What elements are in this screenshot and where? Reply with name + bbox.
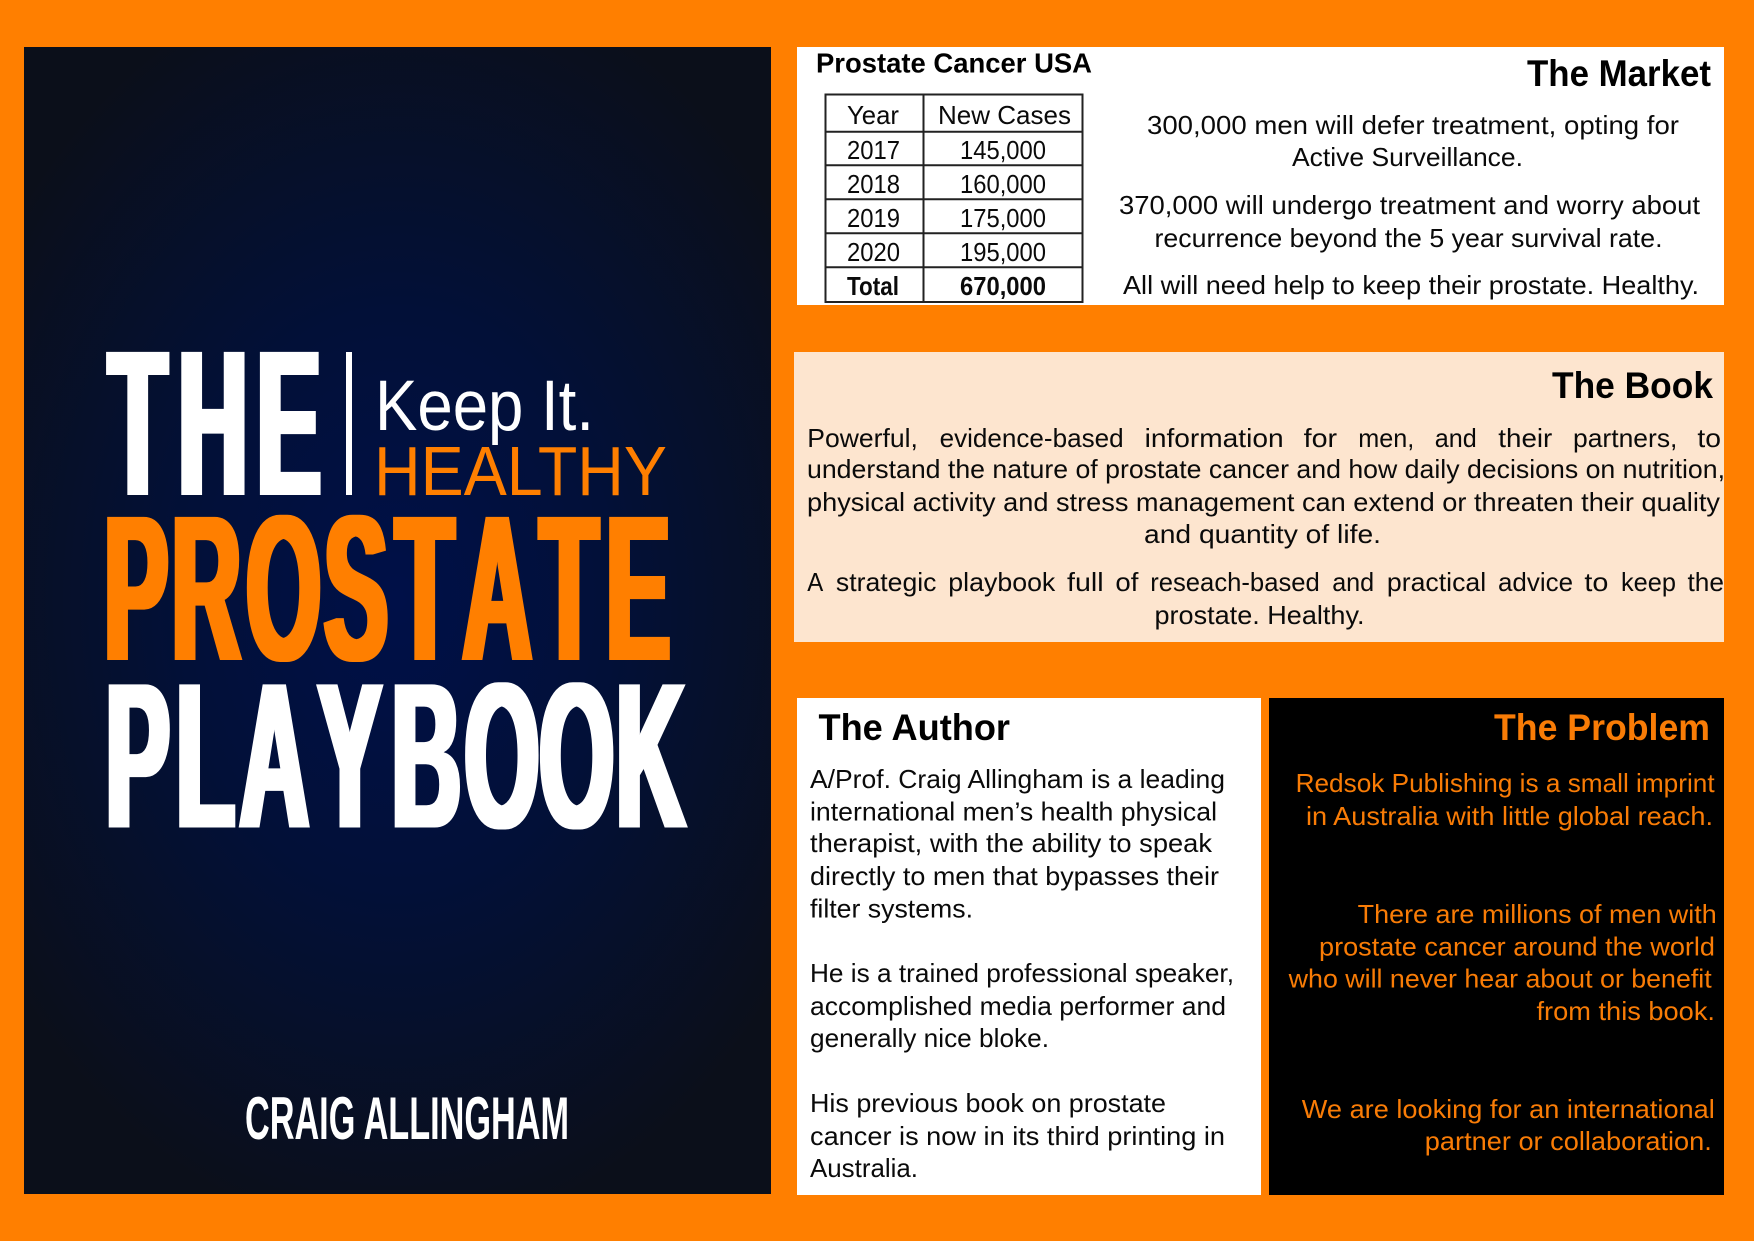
book body text: full: [1067, 567, 1104, 597]
market body text: 370,000 will undergo treatment and worry about: [1119, 190, 1701, 220]
author body text: international men’s health physical: [810, 796, 1217, 826]
author body text: Australia.: [810, 1153, 918, 1183]
author body text: A/Prof. Craig Allingham is a leading: [810, 764, 1225, 794]
cover subtitle: Keep It.: Keep It.: [375, 367, 594, 446]
cover title: PROSTATE: PROSTATE: [104, 472, 670, 705]
panel: the author: [797, 698, 1261, 1195]
cover author name: CRAIG ALLINGHAM: [245, 1085, 569, 1152]
book body text: partners,: [1573, 423, 1677, 453]
book background: [794, 352, 1724, 642]
book body text: information: [1145, 423, 1284, 453]
problem body text: There are millions of men with: [1358, 899, 1717, 929]
book body text: Powerful,: [807, 423, 918, 453]
table: new cases by year: Total: [847, 271, 899, 301]
author body text: [810, 764, 1234, 1183]
book body text: for: [1304, 423, 1337, 453]
cover background: [24, 47, 771, 1194]
problem body text: Redsok Publishing is a small imprint: [1296, 768, 1715, 798]
book body text: prostate. Healthy.: [1154, 600, 1364, 630]
market body text: All will need help to keep their prostate. Healthy.: [1123, 270, 1699, 300]
book body text: keep: [1621, 567, 1676, 597]
book body text: physical activity and stress management can extend or threaten their quality: [807, 487, 1720, 517]
problem body text: who will never hear about or benefit: [1288, 964, 1712, 994]
problem body text: [1288, 768, 1717, 1156]
book body text: evidence-based: [940, 423, 1124, 453]
panel: the market: [797, 47, 1724, 305]
author body text: filter systems.: [810, 894, 973, 924]
author heading: The Author: [818, 707, 1010, 748]
book body text: their: [1498, 423, 1553, 453]
problem body text: We are looking for an international: [1302, 1094, 1715, 1124]
cover title: THE: THE: [109, 307, 321, 540]
table: new cases by year: 195,000: [960, 237, 1046, 267]
table: new cases by year: 160,000: [960, 169, 1046, 199]
cover title: PLAYBOOK: PLAYBOOK: [106, 640, 685, 872]
table: new cases by year: Year: [847, 100, 899, 130]
problem body text: in Australia with little global reach.: [1306, 801, 1713, 831]
cover divider: [346, 352, 352, 495]
book body text: and: [1332, 567, 1374, 597]
author body text: therapist, with the ability to speak: [810, 828, 1213, 858]
market heading: The Market: [1527, 53, 1711, 94]
market body text: [1119, 110, 1701, 300]
market body text: recurrence beyond the 5 year survival rate.: [1154, 223, 1662, 253]
market body text: 300,000 men will defer treatment, opting for: [1147, 110, 1679, 140]
panel: the problem: [1269, 698, 1724, 1195]
book body text: of: [1115, 567, 1139, 597]
table: new cases by year: 2019: [847, 203, 900, 233]
problem background: [1269, 698, 1724, 1195]
problem heading: The Problem: [1494, 707, 1710, 748]
book body text: to: [1697, 423, 1721, 453]
cover subtitle: HEALTHY: HEALTHY: [374, 432, 667, 510]
book body text: understand the nature of prostate cancer and how daily decisions on nutrition,: [807, 454, 1725, 484]
problem body text: prostate cancer around the world: [1319, 932, 1715, 962]
book body text: advice: [1498, 567, 1573, 597]
author body text: His previous book on prostate: [810, 1088, 1166, 1118]
market background: [797, 47, 1724, 305]
author body text: generally nice bloke.: [810, 1023, 1049, 1053]
table: new cases by year: 2020: [847, 237, 900, 267]
table: new cases by year: 175,000: [960, 203, 1046, 233]
table: new cases by year: [826, 94, 1082, 302]
book body text: to: [1584, 567, 1608, 597]
book body text: playbook: [948, 567, 1056, 597]
author background: [797, 698, 1261, 1195]
table: new cases by year: 2018: [847, 169, 900, 199]
table: new cases by year: 2017: [847, 135, 900, 165]
panel: the book: [794, 352, 1725, 642]
book body text: reseach-based: [1150, 567, 1320, 597]
book body text: [807, 423, 1725, 630]
book body text: A: [807, 567, 824, 597]
book heading: The Book: [1552, 365, 1713, 406]
book body text: practical: [1387, 567, 1486, 597]
author body text: accomplished media performer and: [810, 991, 1226, 1021]
book body text: and: [1435, 423, 1477, 453]
table: new cases by year: 670,000: [960, 271, 1046, 301]
author body text: directly to men that bypasses their: [810, 861, 1219, 891]
table heading: Prostate Cancer USA: [816, 48, 1092, 78]
panel: book cover: [24, 47, 771, 1194]
table: new cases by year: 145,000: [960, 135, 1046, 165]
problem body text: partner or collaboration.: [1425, 1126, 1712, 1156]
problem body text: from this book.: [1536, 996, 1715, 1026]
book body text: men,: [1358, 423, 1414, 453]
book body text: and quantity of life.: [1144, 519, 1381, 549]
author body text: He is a trained professional speaker,: [810, 958, 1234, 988]
book body text: strategic: [836, 567, 936, 597]
market body text: Active Surveillance.: [1292, 142, 1523, 172]
book body text: the: [1688, 567, 1724, 597]
author body text: cancer is now in its third printing in: [810, 1121, 1225, 1151]
table: new cases by year: New Cases: [938, 100, 1071, 130]
